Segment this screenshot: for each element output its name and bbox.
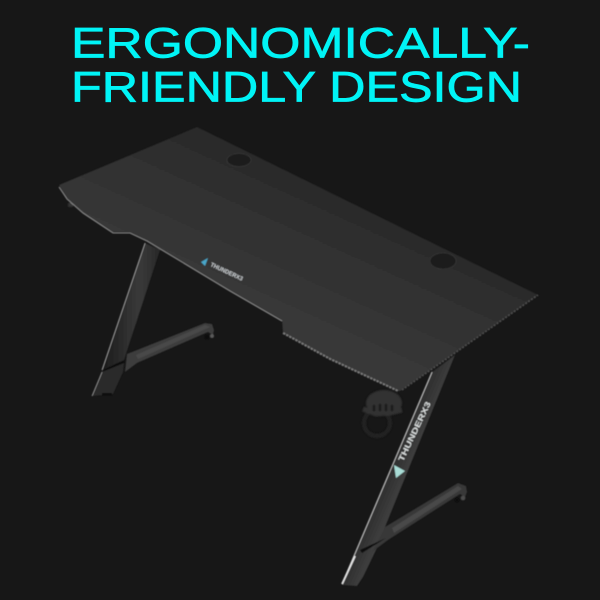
desk assembly — [59, 127, 538, 586]
desk logo — [201, 258, 208, 266]
title: FRIENDLY DESIGN — [71, 64, 522, 112]
headphone hook — [363, 390, 402, 436]
leg brand text: THUNDERX3 — [397, 400, 433, 463]
left leg — [92, 243, 214, 396]
carbon right edge — [402, 295, 538, 390]
leg logo — [394, 465, 405, 478]
grommet right — [430, 253, 456, 269]
carbon front edge — [59, 187, 282, 321]
title: ERGONOMICALLY- — [71, 20, 530, 68]
desk top — [59, 127, 538, 391]
grommet left — [227, 154, 251, 166]
desk brand text: THUNDERX3 — [209, 262, 244, 283]
right leg — [342, 355, 467, 586]
title — [71, 20, 530, 112]
far rear leg hint — [68, 203, 73, 207]
